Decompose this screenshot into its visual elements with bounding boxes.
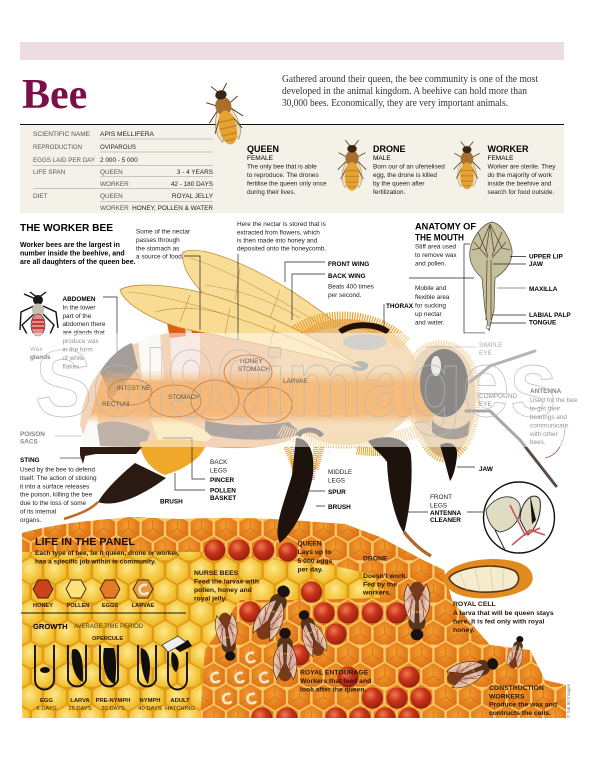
callout: middle legs [300, 469, 352, 511]
callout: abdomen: In the lower [62, 304, 96, 312]
callout: wings: BACK WING [328, 273, 366, 280]
legend: cell types: EGGS [102, 603, 118, 609]
callout: drone: Fed by the [363, 582, 397, 588]
nectar note: honey stomach: is then made into honey and [237, 238, 318, 245]
header rule [20, 124, 564, 126]
callout: nurse bees [194, 570, 259, 602]
chart: growth stages: AVERAGE TIME PERIOD [74, 624, 144, 630]
icon: bee crossing the rule [202, 81, 248, 148]
callout: royal cell: ROYAL CELL [453, 601, 496, 608]
heading: the worker bee: Worker bees are the largest in [20, 242, 120, 249]
queen block: The only bee that is able [247, 164, 317, 170]
callout: abdomen: produce wax [62, 338, 100, 345]
label: poison sacs: POISON [20, 431, 45, 438]
organ labels: LARVAE [283, 378, 308, 385]
callout: back legs: BASKET [210, 495, 236, 502]
facts table: DIET [33, 193, 48, 200]
watermark band [0, 333, 595, 447]
heading: anatomy of the mouth: flexible area [415, 294, 450, 301]
callout: back legs: POLLEN [210, 488, 236, 494]
larva cells [211, 653, 268, 703]
callout: royal entourage: Workers that feed and [300, 678, 371, 685]
top pink bar [20, 42, 564, 60]
heading: the worker bee: THE WORKER BEE [20, 222, 113, 234]
drone block: Born our of an ufertelised [373, 164, 445, 170]
callout: front legs: CLEANER [430, 517, 461, 524]
facts panel background [20, 124, 564, 213]
queen block [247, 144, 327, 196]
heading: anatomy of the mouth: Mobile and [415, 285, 447, 292]
callout: antenna: bearings and [530, 414, 567, 421]
chart: growth stages: OPERCULE [92, 636, 123, 642]
label: wax glands: Wax [30, 346, 43, 353]
callout: sting: of its internal [20, 508, 56, 516]
callout: construction workers: WORKERS [489, 694, 525, 700]
callout: simple eye: EYE [479, 350, 492, 357]
callout: queen: per day. [298, 566, 323, 574]
nectar note: honey stomach: Here the nectar is stored that is [237, 221, 326, 228]
callout: wings [285, 261, 374, 320]
callout: front legs: LEGS [430, 502, 447, 510]
callout: back legs: PINCER [210, 477, 235, 484]
legend: cell types: LARVAE [132, 603, 155, 609]
worker block: search for food outside. [488, 189, 555, 196]
drone block [373, 144, 445, 196]
heading: the worker bee [20, 222, 136, 266]
digestive organs [108, 355, 292, 423]
heading: anatomy of the mouth: and water. [415, 320, 445, 326]
callout: abdomen: are glands that [62, 330, 105, 336]
abdomen [80, 330, 308, 448]
mouth labels and leaders: TONGUE [529, 320, 557, 326]
callout: sting: due to the loss of some [20, 500, 87, 507]
callout: drone: Doesn't work. [363, 573, 407, 580]
facts table: QUEEN [100, 169, 123, 176]
mouth labels and leaders: UPPER LIP [529, 254, 563, 260]
title: Bee [22, 72, 87, 118]
drone block: egg, the drone is killed [373, 172, 437, 179]
worker block: WORKER [488, 144, 529, 154]
callout: wings: FRONT WING [328, 261, 369, 268]
honey cells [204, 539, 432, 729]
chart: growth stages [33, 622, 195, 712]
intro text: developed in the animal kingdom. A beehive can hold more than [282, 86, 527, 97]
panel: life in the panel: Each type of bee, be it queen, drone or worker, [35, 550, 179, 557]
chart: growth stages: GROWTH [33, 622, 68, 631]
diagram: mouth anatomy [470, 222, 512, 331]
facts table: EGGS LAID PER DAY [33, 157, 96, 164]
organ labels: RECTUM [102, 401, 129, 408]
chart: growth stages: LARVA [70, 698, 91, 704]
callout: front legs: FRONT [430, 494, 452, 501]
thorax [272, 319, 420, 445]
facts table: QUEEN [100, 193, 123, 200]
large worker bee illustration [64, 250, 556, 556]
saturated band across body [88, 370, 434, 424]
heading: the worker bee: are all daughters of the queen bee. [20, 259, 136, 266]
label: poison sacs: SACS [20, 438, 38, 446]
heading: the worker bee: number inside the beehive, and [20, 251, 125, 258]
callout: royal entourage [300, 670, 371, 694]
callout: construction workers: contructs the cells. [489, 710, 551, 717]
callout: middle legs: LEGS [328, 478, 345, 484]
compound eye [420, 349, 470, 439]
callout: sting: STING [20, 457, 40, 464]
nectar note: honey stomach: deposited onto the honeycomb. [237, 246, 326, 253]
callout: nurse bees: NURSE BEES [194, 570, 239, 577]
callout: middle legs: SPUR [328, 489, 346, 496]
callout: sting: it into a surface releases [20, 484, 89, 490]
back leg [64, 417, 212, 519]
chart: growth stages: EGG [40, 698, 53, 704]
label: compound eye: EYE [479, 401, 492, 408]
back wing [183, 250, 362, 352]
callout: nurse bees: Feed the larvae with [194, 578, 259, 586]
sting and dark abdomen tip [80, 447, 142, 464]
callout: abdomen: flakes. [62, 364, 81, 370]
chart: growth stages: 6 DAYS [36, 706, 57, 712]
callout: construction workers: Produce the wax and [489, 702, 557, 708]
chart: growth stages: 40 DAYS [138, 706, 162, 712]
chart: growth stages: 15 DAYS [68, 706, 92, 712]
callout: queen: 5 000 eggs [298, 558, 332, 565]
growth tubes [35, 645, 187, 690]
callout: antenna: bees. [530, 439, 546, 446]
callout: nurse bees: pollen, honey and [194, 587, 252, 594]
organ labels: STOMACH [168, 394, 200, 401]
label: wax glands: glands [30, 354, 51, 361]
chart: growth stages: PRE-NYMPH [96, 698, 130, 704]
facts table: REPRODUCTION [33, 144, 82, 151]
callout: antenna: with other [529, 431, 559, 438]
mouth labels and leaders: LABIAL PALP [529, 312, 571, 319]
label: compound eye [479, 393, 517, 408]
callout: simple eye [425, 342, 502, 357]
comb bees [214, 581, 528, 691]
callout: thorax: THORAX [386, 303, 414, 310]
callout: drone [362, 556, 407, 596]
callout: nurse bees: royal jelly. [194, 596, 227, 602]
worker block [488, 144, 556, 196]
organ labels [102, 358, 308, 408]
honeycomb [20, 515, 570, 729]
callout: antenna: Used for the bee [530, 397, 578, 404]
drone block: DRONE [373, 144, 406, 154]
worker block: Worker are sterile. They [488, 164, 556, 170]
queen block: QUEEN [247, 144, 279, 154]
arrow: antenna pointer [545, 428, 565, 458]
nectar note: honey stomach: extracted from flowers, which [237, 229, 320, 236]
callout: back legs: BACK [210, 459, 228, 466]
worker block: FEMALE [488, 155, 514, 162]
growth contents [40, 640, 192, 684]
nectar note: stomach [136, 228, 238, 340]
callout: sting: organs. [20, 517, 42, 524]
front leg [357, 437, 431, 556]
panel: life in the panel: LIFE IN THE PANEL [35, 537, 135, 548]
chart: growth stages: ADULT [170, 698, 190, 704]
callout: construction workers [489, 685, 557, 717]
callout: abdomen: part of the [62, 313, 92, 320]
queen block: during their lives. [247, 189, 296, 196]
head [412, 345, 475, 481]
organ labels: HONEY [240, 358, 263, 365]
intro text: 30,000 bees. Economically, they are very important animals. [282, 98, 508, 109]
mouth labels and leaders: MAXILLA [529, 286, 558, 293]
callout: queen: Lays up to [298, 549, 332, 556]
heading: anatomy of the mouth: and pollen. [415, 260, 446, 268]
organ labels: INTESTINE [117, 385, 150, 392]
facts table: 3 - 4 YEARS [177, 169, 213, 176]
orange patches above the wing [167, 321, 275, 338]
image credit: © Sol 90 Images [565, 683, 571, 718]
callout: royal entourage: ROYAL ENTOURAGE [300, 670, 369, 676]
callout: sting: itself. The action of sticking [20, 475, 97, 482]
facts table: 2 000 - 5 000 [100, 157, 138, 164]
intro text [282, 74, 538, 109]
callout: wings: Beats 400 times [328, 284, 374, 290]
nectar note: stomach: passes through [136, 237, 180, 244]
callout: sting: Used by the bee to defend [20, 466, 95, 474]
label: poison sacs [20, 431, 82, 446]
nectar note: honey stomach [237, 221, 326, 253]
icon: antenna cleaner inset [484, 482, 554, 553]
chart: growth stages: 30 DAYS [101, 706, 125, 712]
organ labels: STOMACH [238, 366, 270, 373]
callout: jaw [457, 466, 494, 473]
callout: antenna: communicate [530, 422, 568, 430]
callout: back legs: LEGS [210, 468, 227, 474]
facts table: HONEY, POLLEN & WATER [132, 205, 213, 212]
royal cell [443, 559, 533, 598]
drone block: MALE [373, 155, 391, 162]
panel: life in the panel [21, 537, 186, 613]
drone block: fertilization. [373, 189, 406, 196]
legend: cell types: POLLEN [67, 603, 89, 609]
icon: drone bee [338, 140, 366, 191]
antennae [466, 351, 556, 486]
callout: abdomen [62, 296, 117, 370]
facts table: 42 - 180 DAYS [171, 181, 213, 188]
callout: construction workers: CONSTRUCTION [489, 685, 544, 692]
heading: anatomy of the mouth: for sucking [415, 302, 446, 310]
callout: front legs: ANTENNA [430, 510, 462, 517]
callout: middle legs: BRUSH [328, 504, 351, 511]
callout: sting [20, 457, 97, 524]
callout: queen: QUEEN [298, 540, 322, 548]
facts table: LIFE SPAN [33, 169, 66, 176]
chart: growth stages: HATCHING [165, 706, 195, 712]
panel: life in the panel: has a specific job within te community. [35, 558, 156, 566]
callout: drone: workers. [362, 590, 391, 596]
callout: royal entourage: look after the queen. [300, 686, 367, 694]
callout: wings: per second. [328, 292, 362, 299]
front wing [120, 285, 362, 368]
callout: antenna [529, 388, 578, 446]
nectar note: stomach: a source of food. [136, 254, 184, 260]
legend: cell types: HONEY [33, 603, 53, 609]
facts table [33, 131, 214, 212]
legend: cell types [33, 580, 155, 609]
heading: anatomy of the mouth: THE MOUTH [415, 232, 464, 244]
heading: anatomy of the mouth: to remove wax [415, 252, 457, 259]
callout: middle legs: MIDDLE [328, 469, 352, 476]
callout: back legs [160, 438, 236, 506]
callout: royal cell: A larva that will be queen stays [453, 610, 554, 617]
callout: abdomen: ABDOMEN [62, 296, 96, 303]
queen block: to reproduce. The drones [247, 172, 319, 179]
intro text: Gathered around their queen, the bee community is one of the most [282, 74, 538, 85]
callout: queen [298, 540, 332, 574]
chart: growth stages: NYMPH [140, 698, 160, 704]
label: wax glands [30, 346, 51, 361]
label: compound eye: COMPOUND [479, 393, 517, 400]
middle leg [277, 430, 322, 543]
callout: antenna: ANTENNA [530, 388, 562, 395]
callout: jaw: JAW [479, 466, 494, 473]
facts table: WORKER [100, 181, 129, 188]
callout: back legs: BRUSH [160, 498, 183, 506]
callout: front legs [405, 494, 483, 524]
icon: abdomen diagram [20, 292, 58, 336]
heading: anatomy of the mouth: up nectar [415, 311, 443, 318]
callout: sting: the poison, killing the bee [20, 492, 93, 498]
facts table: APIS MELLIFERA [100, 131, 155, 138]
worker block: do the majority of work [488, 172, 553, 179]
callout: abdomen: abdomen there [62, 321, 106, 328]
heading: anatomy of the mouth: Stiff area used [415, 244, 457, 250]
heading: anatomy of the mouth [415, 222, 476, 326]
facts table: ROYAL JELLY [172, 193, 214, 200]
mouth labels and leaders: JAW [529, 261, 544, 268]
callout: royal cell: here. It is fed only with royal [453, 618, 545, 626]
callout: drone: DRONE [363, 556, 388, 562]
callout: abdomen: in the form [62, 346, 93, 354]
mouth labels and leaders [409, 244, 571, 333]
callout: antenna: to get their [530, 406, 561, 412]
drone block: by the queen after [373, 180, 425, 188]
facts table: WORKER [100, 205, 129, 212]
callout: simple eye: SIMPLE [479, 342, 502, 349]
nectar note: stomach: Some of the nectar [136, 228, 191, 236]
nectar note: stomach: the stomach as [136, 246, 179, 252]
callout: royal cell [453, 601, 554, 634]
worker block: inside the beehive and [488, 180, 552, 188]
heading: anatomy of the mouth: ANATOMY OF [415, 222, 476, 233]
icon: worker bee [454, 142, 480, 189]
callout: abdomen: of white [62, 355, 85, 362]
callout: royal cell: honey. [453, 627, 475, 634]
facts table: SCIENTIFIC NAME [33, 131, 90, 138]
queen block: fertilise the queen only once [247, 180, 327, 188]
facts table: OVIPAROUS [100, 144, 136, 151]
callout: thorax [384, 303, 414, 328]
queen block: FEMALE [247, 155, 274, 162]
